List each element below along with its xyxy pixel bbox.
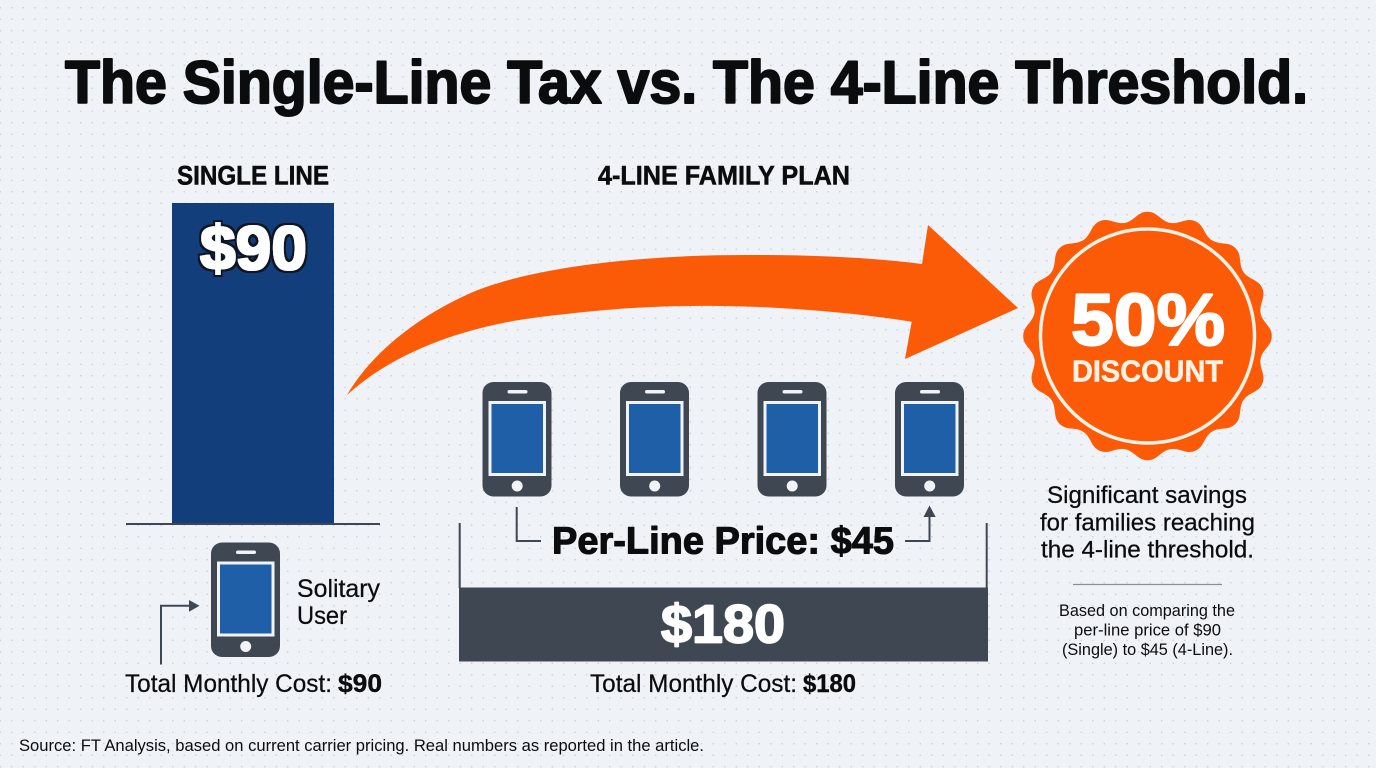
bar: family plan total xyxy=(459,588,988,662)
panel: single line xyxy=(125,160,382,698)
source note: Source: FT Analysis, based on current carrier pricing. Real numbers as reported in the article. xyxy=(19,737,704,755)
badge label: DISCOUNT xyxy=(1072,354,1223,388)
title: The Single-Line Tax vs. The 4-Line Threshold. xyxy=(65,48,1308,116)
text: discount basis note: per-line price of $90 xyxy=(1074,622,1221,640)
text: savings summary: the 4-line threshold. xyxy=(1041,536,1254,564)
bracket: family plan xyxy=(460,523,987,588)
total monthly cost: family: $180 xyxy=(803,670,856,698)
icon: phone 4 xyxy=(895,382,964,496)
text: savings summary xyxy=(1040,482,1255,564)
label: solitary user: User xyxy=(297,602,347,630)
arrow: cost to phone xyxy=(161,600,200,664)
icon: phone, solitary user xyxy=(211,542,280,657)
arrow: curved orange xyxy=(347,225,1018,395)
bar baseline xyxy=(126,523,380,525)
text: discount basis note: (Single) to $45 (4-Line). xyxy=(1062,641,1233,659)
bar value: $180: $180 xyxy=(661,594,785,654)
per-line price: Per-Line Price: $45 xyxy=(552,520,894,562)
icon: phone 2 xyxy=(620,382,689,496)
text: savings summary: Significant savings xyxy=(1047,482,1247,509)
heading: single line: SINGLE LINE xyxy=(177,160,329,190)
badge: 50% discount xyxy=(1024,212,1272,460)
icon: phone 3 xyxy=(758,382,826,496)
text: discount basis note xyxy=(1059,602,1235,659)
badge scalloped edge xyxy=(1024,212,1272,460)
icon: phone 1 xyxy=(482,382,552,496)
badge ring xyxy=(1040,229,1254,443)
total monthly cost: single: Total Monthly Cost: xyxy=(125,670,332,698)
arrow: per-line price to phone xyxy=(905,506,936,541)
total monthly cost: single: $90 xyxy=(338,670,382,698)
label: solitary user xyxy=(297,575,380,630)
panel: 4-line family plan xyxy=(459,160,988,698)
connector: phone to per-line price xyxy=(517,507,541,541)
bar: single line cost xyxy=(172,203,334,524)
label: solitary user: Solitary xyxy=(297,575,380,603)
bar value: $90 xyxy=(200,214,307,284)
heading: 4-line family plan: 4-LINE FAMILY PLAN xyxy=(598,160,850,190)
total monthly cost: family: Total Monthly Cost: xyxy=(590,670,797,698)
badge value: 50% xyxy=(1071,280,1225,361)
text: savings summary: for families reaching xyxy=(1040,510,1255,536)
text: discount basis note: Based on comparing the xyxy=(1059,602,1235,620)
